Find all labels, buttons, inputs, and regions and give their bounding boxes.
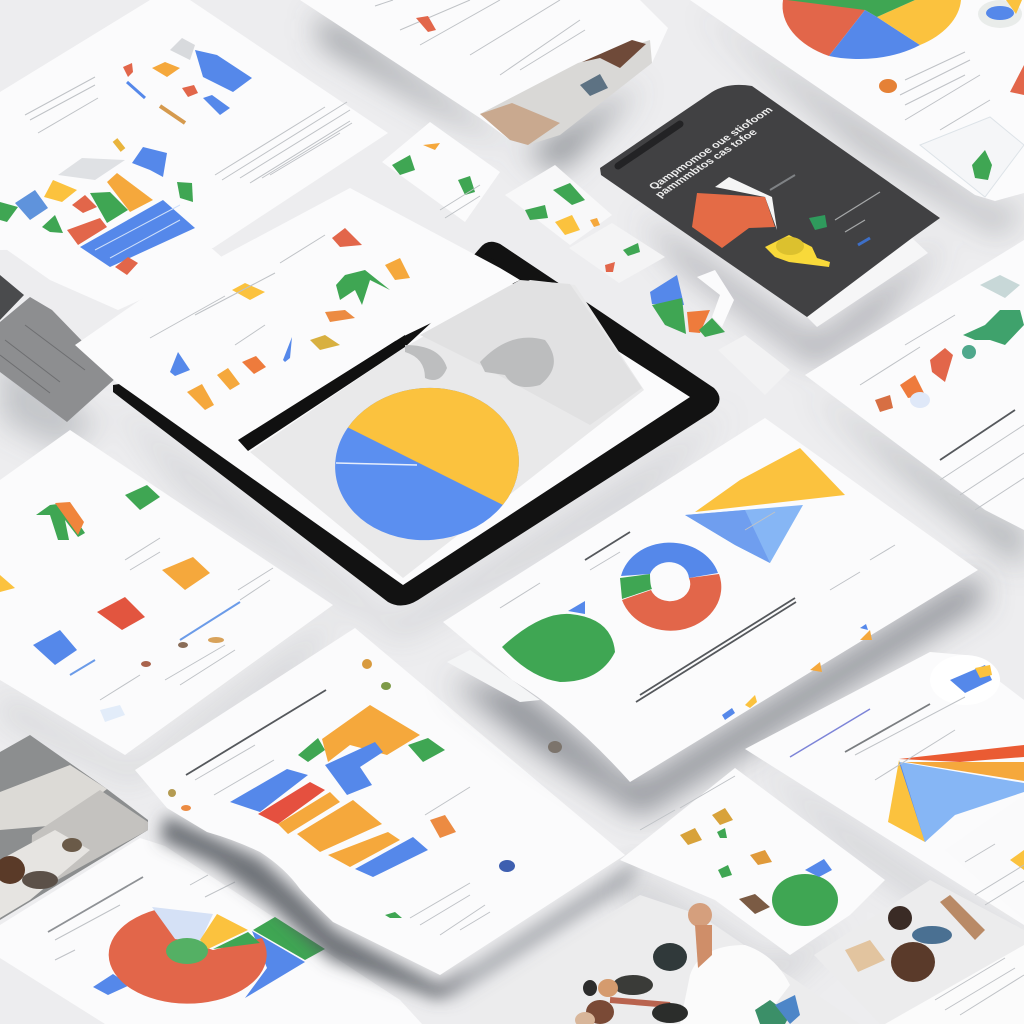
icon: small red figure <box>416 16 436 32</box>
panel: bottom-center sheet with bar chart <box>135 628 625 975</box>
pie chart <box>783 0 961 59</box>
upper gray card <box>420 280 642 425</box>
panel: left-middle sheet with icon tiles <box>0 430 333 755</box>
pie chart <box>93 907 325 1004</box>
panel: photo at left <box>0 735 148 920</box>
icons on large sheet <box>150 228 410 410</box>
yellow tape icon <box>765 235 830 267</box>
photo on top-center sheet <box>480 40 652 145</box>
green circle <box>772 874 838 926</box>
phone heading: pammmbtos cas tofoe <box>653 128 760 200</box>
phone heading: Qampmomoe oue stiofoom <box>647 105 776 192</box>
small icons <box>680 808 772 878</box>
panel: right sheet with colored figures <box>805 240 1024 530</box>
large sheet overlapping the tablet <box>75 188 520 452</box>
lines <box>855 697 965 780</box>
donut chart <box>620 543 721 631</box>
shadow of bottom-center sheet <box>160 815 640 1000</box>
blue tab <box>805 859 832 877</box>
panel: small sheet C <box>569 223 665 283</box>
panel: gray folded sheet at left <box>0 275 117 422</box>
tablet black corner <box>483 243 560 290</box>
icon: blue badge <box>978 0 1022 28</box>
photo: right people <box>814 880 1024 1024</box>
panel: small sheet A <box>382 122 500 222</box>
text block <box>25 77 352 183</box>
chart blocks <box>0 140 195 275</box>
tiny colored marks <box>722 624 872 720</box>
red arrow shape <box>692 193 775 248</box>
panel: top-left document sheet <box>0 0 388 250</box>
orange callout icon <box>430 815 456 838</box>
panel: right-bottom sheet with triangle chart <box>745 652 1024 925</box>
heading lines <box>48 877 143 932</box>
white card with icon <box>930 655 1000 705</box>
yellow tile <box>0 575 15 592</box>
panel: top-right sheet with pie chart <box>690 0 1024 201</box>
small round token <box>548 741 562 753</box>
phone speaker <box>618 124 680 166</box>
shadow of center-right sheet <box>450 575 985 815</box>
white garment <box>680 945 790 1024</box>
panel: sheet under center-right <box>447 650 540 702</box>
small diagram <box>70 538 273 722</box>
red tile <box>97 597 145 630</box>
gray screen panel <box>250 280 644 578</box>
phone mockup <box>600 85 940 327</box>
green blob <box>502 614 615 682</box>
small blue triangle <box>568 601 585 614</box>
pie chart on tablet <box>335 388 519 540</box>
icon: broken small pie <box>650 270 734 337</box>
icon cluster <box>123 38 252 123</box>
tablet screen white <box>116 272 690 585</box>
phone labels <box>835 192 880 232</box>
tablet <box>75 188 720 606</box>
figures <box>875 275 1024 412</box>
green icon <box>809 215 827 230</box>
gray blobs <box>405 345 447 380</box>
mini map chart <box>920 117 1024 197</box>
green tile <box>125 485 160 510</box>
orange tile <box>162 557 210 590</box>
brown card <box>739 894 770 914</box>
yellow blue fan chart <box>685 448 845 563</box>
panel: top-center sheet with photo <box>300 0 668 145</box>
blue tile <box>33 630 77 665</box>
triangle chart <box>888 745 1024 842</box>
photo: people group <box>470 895 860 1024</box>
white folded paper <box>715 177 777 230</box>
panel: bottom-right sheet with green circle <box>620 768 885 955</box>
leaf icon <box>36 502 85 540</box>
panel: center-right sheet with donut chart <box>443 418 978 782</box>
labels <box>585 532 795 695</box>
tablet top black bar <box>238 335 405 451</box>
panel: small sheet B <box>505 165 612 245</box>
icon: orange ring <box>879 79 897 93</box>
sheet heading <box>186 690 326 775</box>
icon: red tag <box>1010 65 1024 95</box>
panel: bottom-left sheet with donut pie <box>0 838 422 1024</box>
bar chart <box>230 705 445 877</box>
panel: colorful chart sheet <box>0 131 225 310</box>
text lines <box>900 52 990 130</box>
panel: faint sheet near small pie <box>718 335 790 395</box>
panel: lower-right text sheet <box>945 795 1024 920</box>
small round icons <box>168 659 515 918</box>
